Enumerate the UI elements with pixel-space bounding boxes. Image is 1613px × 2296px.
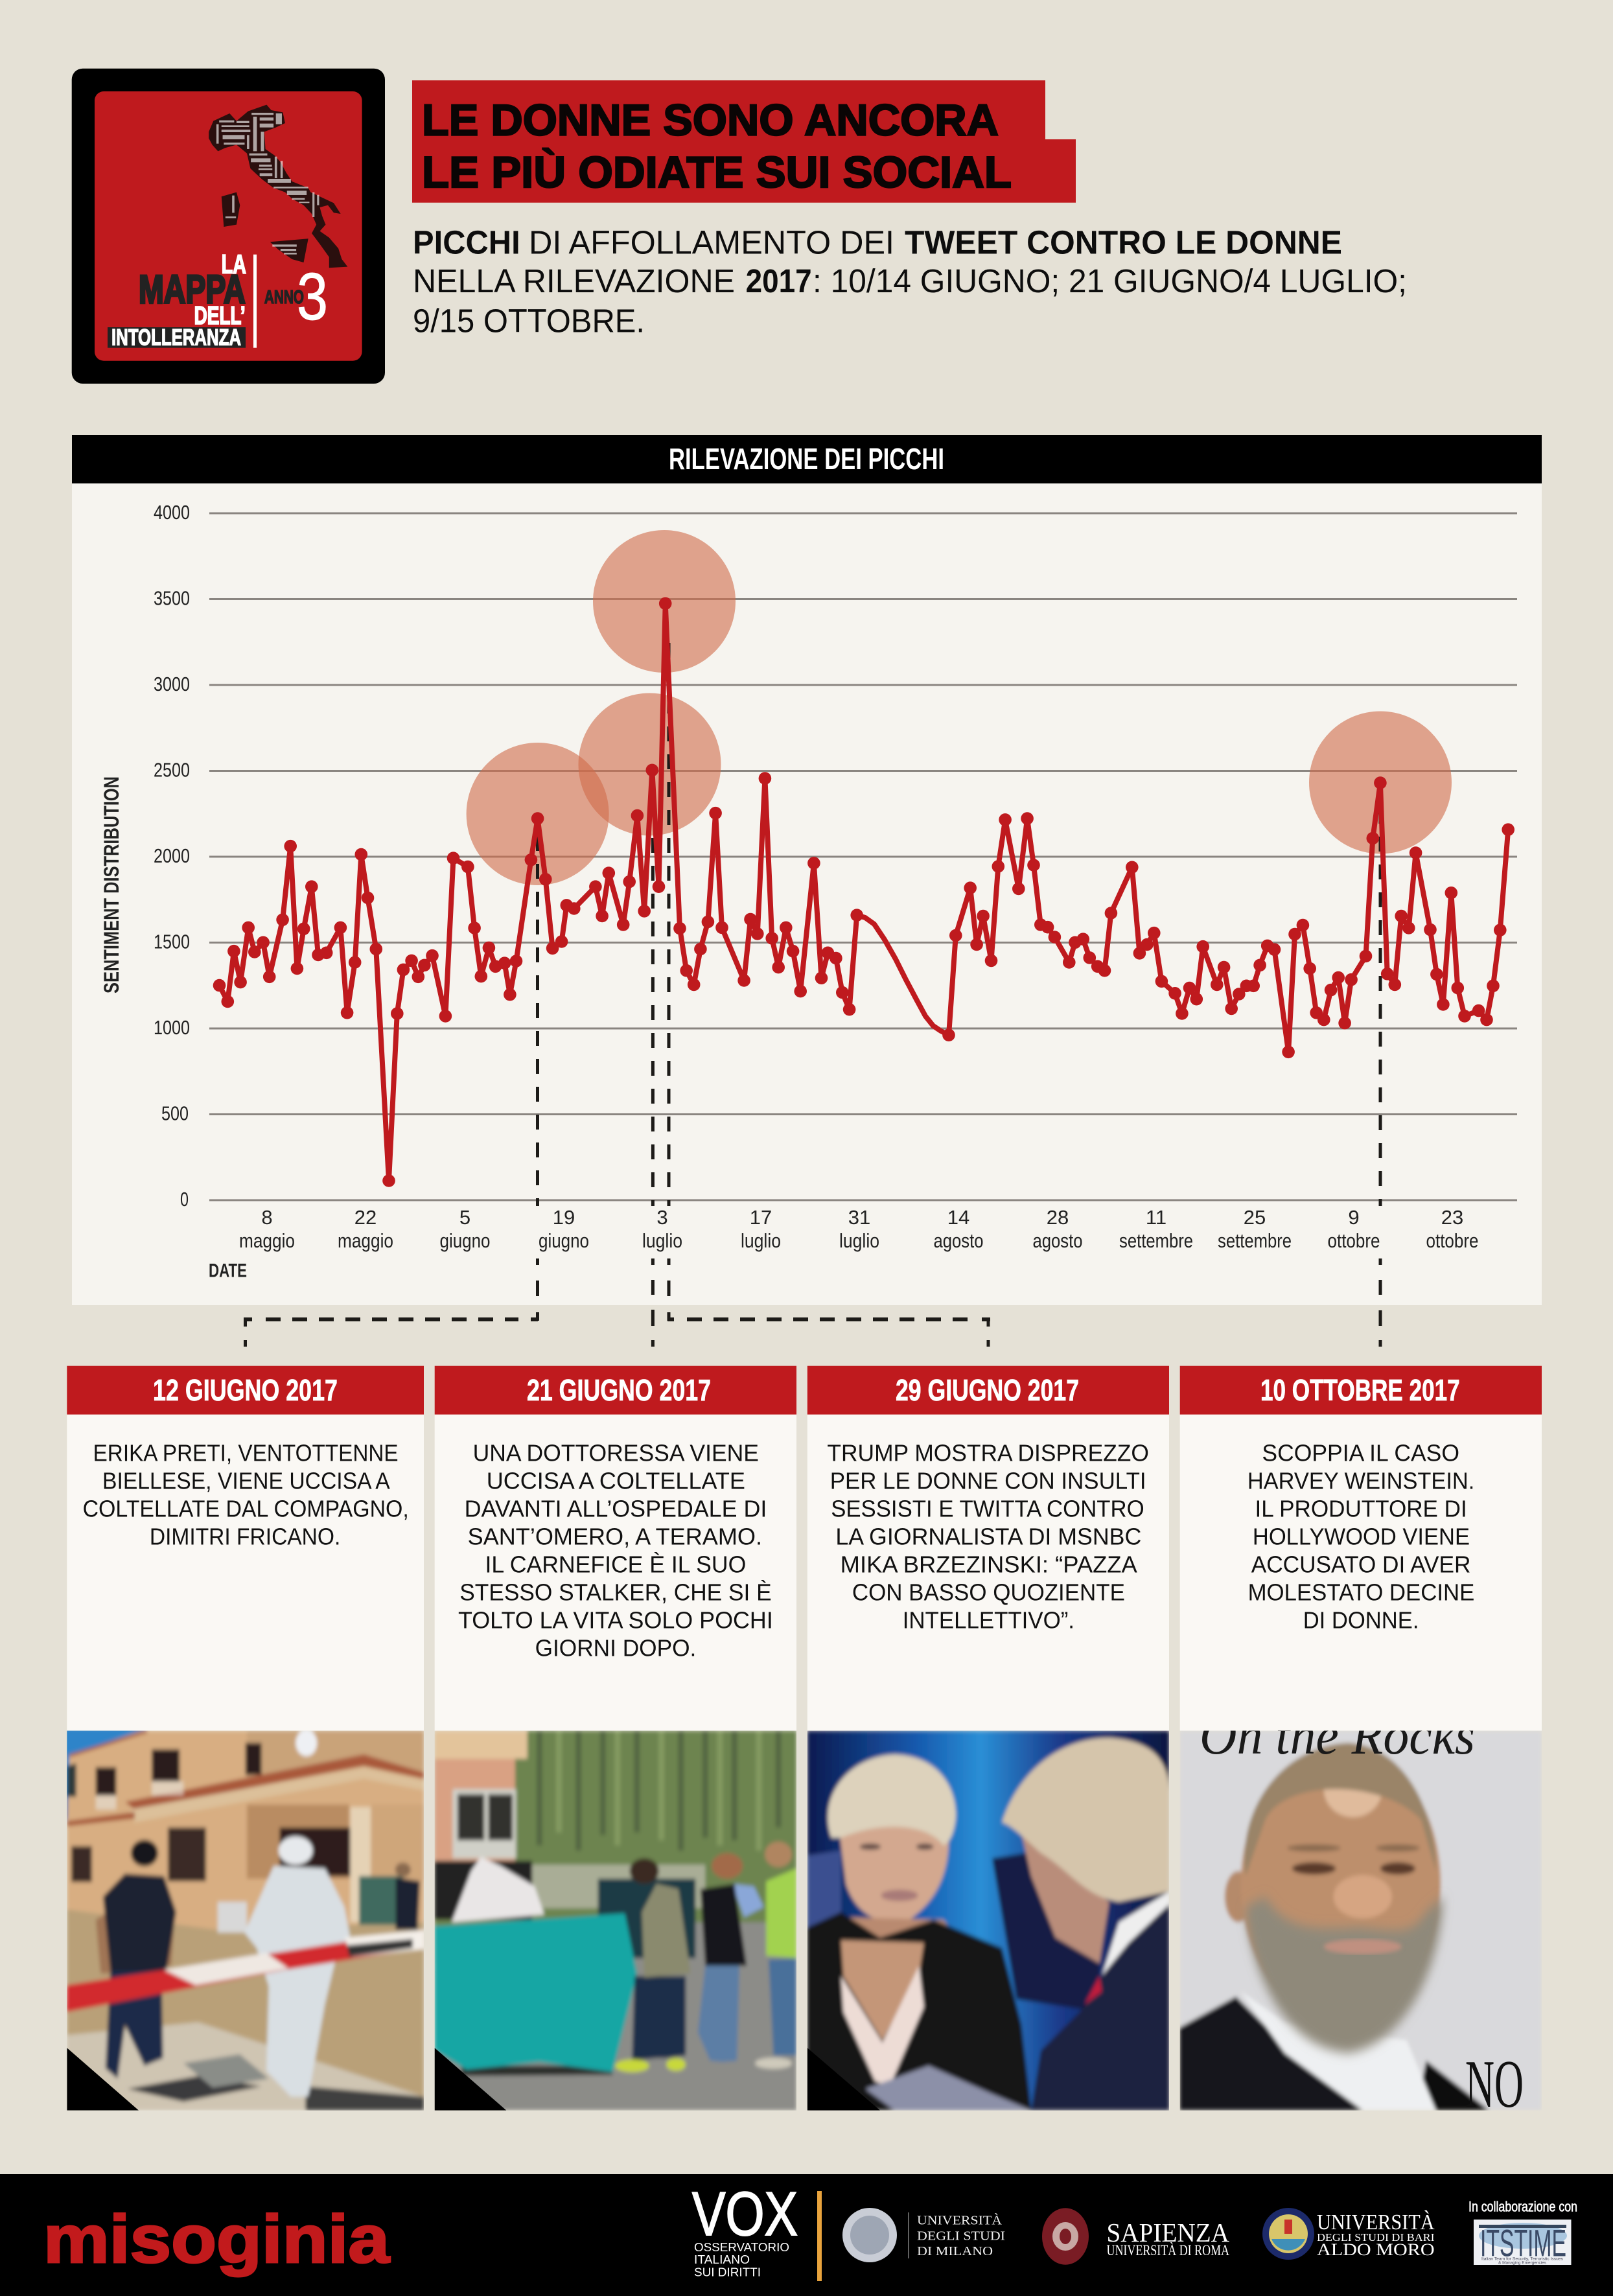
x-axis labels: 14 [947,1206,969,1229]
logo: Università di Bari Aldo Moro: DEGLI STUDI DI BARI [1317,2231,1435,2244]
logo wordmark [108,249,328,351]
arrow: dashed connectors to event cards [244,1258,1380,1347]
x-axis labels: giugno [439,1229,490,1252]
subtitle text: TWEET CONTRO LE DONNE [905,224,1342,261]
logo: Università di Milano [842,2208,1005,2262]
chart heading: rilevazione dei picchi [72,435,1542,483]
card text [458,1439,773,1661]
card text: DI DONNE. [1303,1606,1419,1633]
card text: CON BASSO QUOZIENTE [852,1579,1125,1605]
x-axis labels: settembre [1119,1229,1193,1252]
card text: MIKA BRZEZINSKI: “PAZZA [841,1551,1137,1577]
card text: UCCISA A COLTELLATE [487,1467,745,1494]
photo: crime scene at the house [62,1728,424,2111]
card text: UNA DOTTORESSA VIENE [473,1439,759,1466]
title banner: LE PIÙ ODIATE SUI SOCIAL [422,148,1012,197]
card text: ACCUSATO DI AVER [1251,1551,1471,1577]
x-axis labels: settembre [1218,1229,1292,1252]
x-axis labels: 25 [1244,1206,1266,1229]
logo: VOX osservatorio: OSSERVATORIO [694,2240,789,2254]
card text: TOLTO LA VITA SOLO POCHI [458,1606,773,1633]
card text: IL CARNEFICE È IL SUO [485,1551,746,1577]
x-axis labels: agosto [933,1229,984,1252]
subtitle text: : 10/14 GIUGNO; 21 GIUGNO/4 LUGLIO; [813,262,1407,299]
photo: Harvey Weinstein portrait [1180,1706,1542,2122]
card heading: 29 GIUGNO 2017 [896,1373,1079,1407]
y-axis labels: 1000 [154,1016,190,1039]
panel: event card 12 giugno 2017 [67,1366,424,1731]
card text [827,1439,1149,1633]
card text: BIELLESE, VIENE UCCISA A [102,1467,390,1494]
card text: MOLESTATO DECINE [1248,1579,1474,1605]
x-axis labels: 11 [1146,1206,1166,1229]
x-axis labels: 19 [553,1206,575,1229]
photo: covered victim and bystanders [435,1731,796,2111]
chart heading: rilevazione dei picchi: RILEVAZIONE DEI PICCHI [669,442,944,476]
card text: GIORNI DOPO. [535,1634,696,1661]
logo: Università di Milano: DI MILANO [917,2244,993,2258]
card text [83,1439,409,1549]
x-axis labels: maggio [338,1229,393,1252]
x-axis labels: 28 [1047,1206,1069,1229]
y-axis labels: 500 [161,1102,189,1125]
x-axis labels: 17 [750,1206,772,1229]
x-axis labels: luglio [741,1229,781,1252]
logo wordmark: DELL’ [194,302,246,330]
subtitle text: 9/15 OTTOBRE. [413,303,645,340]
x-axis labels: giugno [539,1229,589,1252]
logo: VOX osservatorio [692,2179,822,2281]
card text: SCOPPIA IL CASO [1262,1439,1459,1466]
card text: HOLLYWOOD VIENE [1253,1523,1470,1549]
x-axis labels: 5 [459,1206,470,1229]
logo: Sapienza: SAPIENZA [1107,2218,1229,2247]
x-axis labels: 8 [261,1206,273,1229]
panel: event card 29 giugno 2017 [807,1366,1169,1731]
logo: Università di Bari Aldo Moro: UNIVERSITÀ [1317,2210,1435,2234]
card text: TRUMP MOSTRA DISPREZZO [827,1439,1149,1466]
title banner: LE DONNE SONO ANCORA [422,96,999,145]
y-axis labels: 2500 [154,758,190,782]
title banner [412,80,1076,203]
card heading: 12 GIUGNO 2017 [153,1373,338,1407]
x-axis labels: ottobre [1426,1229,1479,1252]
y-axis labels: 4000 [154,501,190,524]
panel: event card 21 giugno 2017 [435,1366,796,1731]
x-axis labels: luglio [642,1229,682,1252]
card text: DAVANTI ALL’OSPEDALE DI [465,1495,767,1522]
card text [1247,1439,1474,1633]
y-axis labels: 2000 [154,844,190,867]
footer bar [0,2174,1613,2296]
x-axis labels: 31 [848,1206,870,1229]
logo: La mappa dell'intolleranza anno 3 [72,69,385,384]
card heading: 21 GIUGNO 2017 [527,1373,711,1407]
card text: LA GIORNALISTA DI MSNBC [835,1523,1141,1549]
logo: Università di Bari Aldo Moro: ALDO MORO [1317,2240,1435,2259]
card text: HARVEY WEINSTEIN. [1247,1467,1474,1494]
card text: IL PRODUTTORE DI [1255,1495,1467,1522]
card text: INTELLETTIVO”. [903,1606,1074,1633]
x-axis labels: 23 [1441,1206,1463,1229]
subtitle text [413,224,1407,340]
subtitle text: NELLA RILEVAZIONE [413,262,735,299]
line chart: sentiment distribution [100,501,1517,1282]
card text: ERIKA PRETI, VENTOTTENNE [93,1439,399,1466]
card text: STESSO STALKER, CHE SI È [459,1579,772,1605]
card text: COLTELLATE DAL COMPAGNO, [83,1495,409,1522]
logo: Sapienza [1042,2208,1229,2265]
x-axis labels: maggio [239,1229,295,1252]
y-axis labels [154,501,190,1211]
subtitle text: 2017 [746,262,812,299]
footer heading: misoginia: misoginia [43,2202,390,2277]
logo: in collaborazione con ITSTIME: & Managing Emergencies [1498,2262,1546,2266]
logo: Sapienza: UNIVERSITÀ DI ROMA [1107,2242,1229,2258]
photo: Trump and Mika Brzezinski [807,1731,1169,2111]
logo: VOX osservatorio: ITALIANO [694,2253,750,2266]
subtitle text: DI AFFOLLAMENTO DEI [529,224,894,261]
x-axis labels: luglio [839,1229,879,1252]
x-axis labels: 9 [1348,1206,1360,1229]
card heading: 10 OTTOBRE 2017 [1260,1373,1460,1407]
icon: map of Italy [209,105,347,268]
y-axis labels: 0 [180,1188,189,1211]
logo wordmark: LA [222,249,246,279]
y-axis title: SENTIMENT DISTRIBUTION [100,776,123,993]
y-axis labels: 3000 [154,673,190,695]
x-axis labels: 3 [656,1206,668,1229]
photo: Harvey Weinstein portrait: On the Rocks [1200,1706,1475,1766]
data line [219,603,1508,1181]
peak highlight circles [467,530,1452,885]
logo wordmark: MAPPA [139,268,246,312]
logo wordmark: ANNO [264,287,304,308]
x-axis labels: agosto [1033,1229,1082,1252]
panel: chart background [72,483,1542,1305]
y-axis labels: 3500 [154,587,190,609]
logo: Università di Bari Aldo Moro [1262,2208,1435,2260]
logo: VOX osservatorio: SUI DIRITTI [694,2266,761,2279]
card text: PER LE DONNE CON INSULTI [830,1467,1146,1494]
x-axis labels [239,1206,1479,1252]
logo wordmark: 3 [297,259,328,334]
card text: SESSISTI E TWITTA CONTRO [831,1495,1144,1522]
card text: DIMITRI FRICANO. [150,1523,340,1549]
subtitle text: PICCHI [413,224,520,261]
logo: VOX osservatorio: VOX [692,2179,798,2249]
logo: in collaborazione con ITSTIME: Italian Team for Security, Terroristic Issues [1481,2258,1563,2262]
logo wordmark: INTOLLERANZA [111,325,241,351]
logo: Università di Milano: UNIVERSITÀ [917,2213,1003,2228]
logo: Università di Milano: DEGLI STUDI [917,2229,1005,2244]
photo: Harvey Weinstein portrait: NO [1465,2046,1524,2122]
x-axis title: DATE [209,1260,247,1282]
y-axis labels: 1500 [154,931,190,953]
logo: in collaborazione con ITSTIME: In collaborazione con [1468,2199,1577,2215]
x-axis labels: ottobre [1327,1229,1380,1252]
panel: event card 10 ottobre 2017 [1180,1366,1542,1731]
x-axis labels: 22 [354,1206,377,1229]
card text: SANT’OMERO, A TERAMO. [468,1523,762,1549]
dashed connectors inside chart [538,643,1380,1206]
logo: in collaborazione con ITSTIME [1468,2199,1577,2266]
